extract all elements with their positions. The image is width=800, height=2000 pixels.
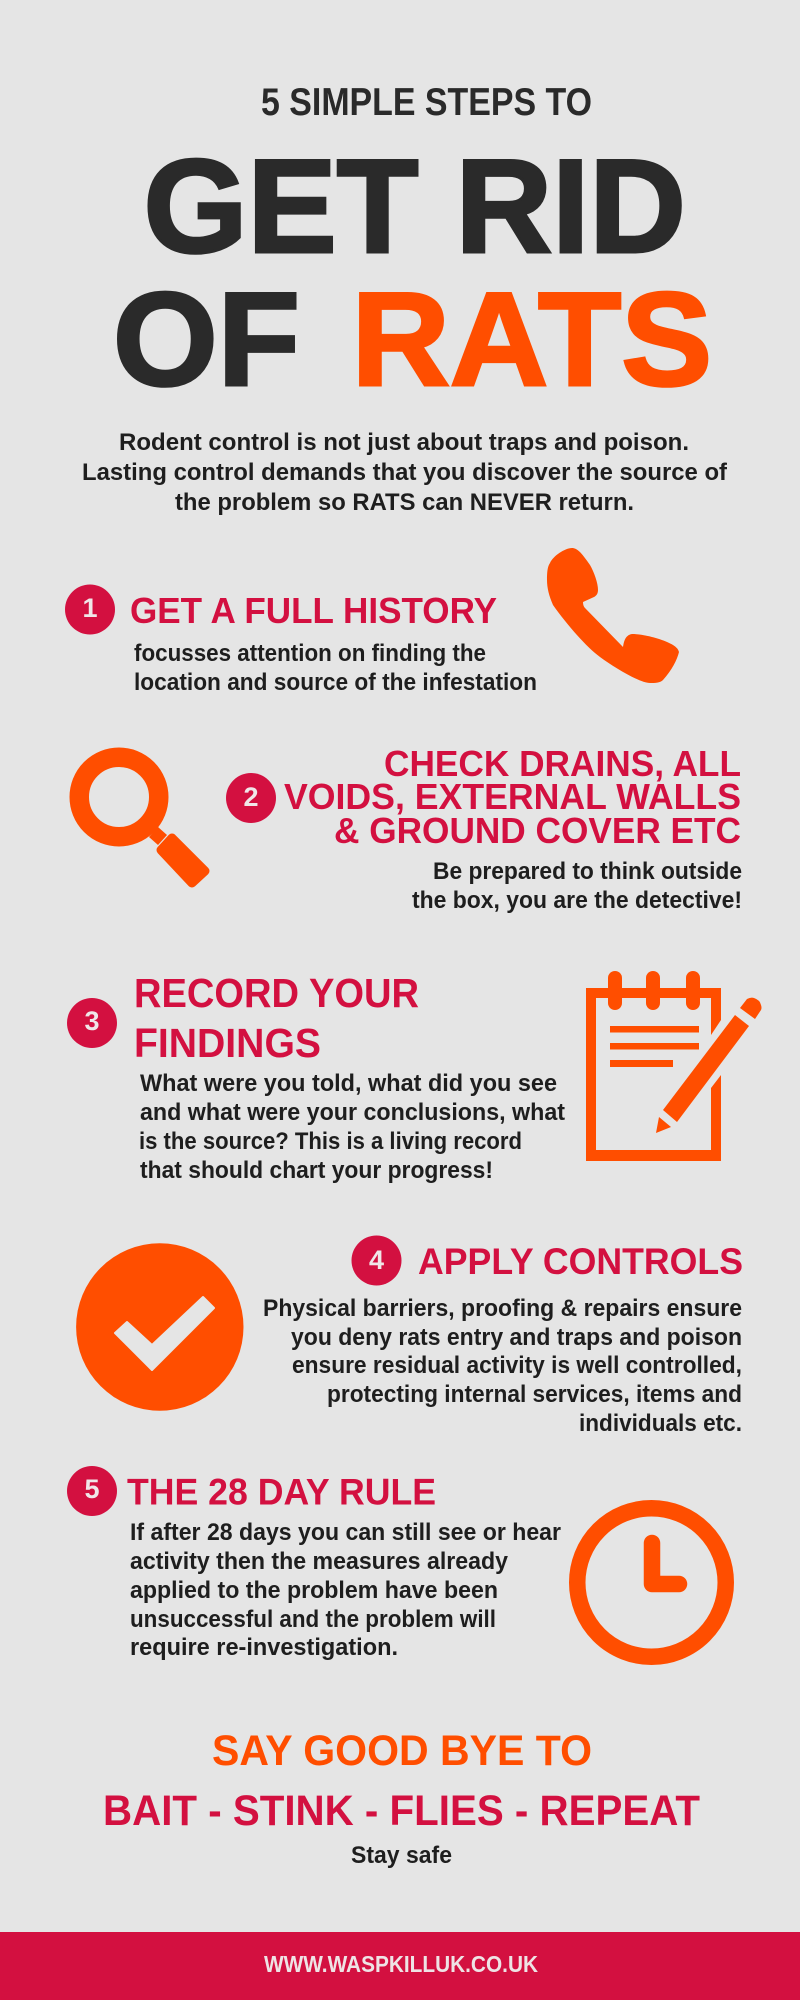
icon: notepad and pencil — [586, 971, 762, 1161]
step 3 text: What were you told, what did you see — [140, 1070, 557, 1097]
step 5 text: applied to the problem have been — [130, 1577, 498, 1604]
step 4 text: Physical barriers, proofing & repairs ensure — [263, 1295, 742, 1322]
step 2 text: the box, you are the detective! — [412, 887, 742, 914]
step 5 panel — [67, 1466, 726, 1661]
number badge 1 — [65, 584, 115, 634]
number badge 3 — [67, 998, 117, 1048]
step 3 text: is the source? This is a living record — [139, 1128, 522, 1155]
step 3 panel — [67, 970, 762, 1184]
number badge 5: 5 — [84, 1474, 100, 1504]
step 4 heading: APPLY CONTROLS — [418, 1241, 743, 1282]
bait stink flies repeat heading: BAIT - STINK - FLIES - REPEAT — [103, 1787, 700, 1835]
step 5 heading: THE 28 DAY RULE — [127, 1472, 436, 1512]
step 3 text: that should chart your progress! — [140, 1157, 493, 1184]
icon: magnifying glass — [79, 757, 205, 883]
step 4 text: ensure residual activity is well controlled, — [292, 1352, 742, 1379]
stay safe text: Stay safe — [351, 1842, 452, 1869]
intro text — [82, 429, 728, 516]
number badge 3: 3 — [84, 1006, 100, 1036]
website address: WWW.WASPKILLUK.CO.UK — [264, 1951, 538, 1977]
step 4 text: protecting internal services, items and — [327, 1381, 742, 1408]
intro text: the problem so RATS can NEVER return. — [175, 489, 634, 516]
number badge 5 — [67, 1466, 117, 1516]
step 3 text — [139, 1070, 565, 1184]
title line: get rid: GET RID — [144, 132, 686, 281]
step 5 text: require re-investigation. — [130, 1634, 398, 1661]
step 2 heading — [284, 743, 741, 851]
step 1 text: focusses attention on finding the — [134, 640, 486, 667]
footer bar — [0, 1932, 800, 2000]
say good bye heading: SAY GOOD BYE TO — [212, 1727, 592, 1775]
step 5 text: If after 28 days you can still see or hear — [130, 1519, 561, 1546]
subtitle: 5 SIMPLE STEPS TO — [261, 81, 592, 124]
icon: phone — [547, 548, 679, 683]
number badge 4: 4 — [369, 1245, 384, 1275]
step 4 text: individuals etc. — [579, 1410, 742, 1437]
title line: of: OF — [113, 266, 300, 414]
step 2 panel — [79, 743, 742, 914]
step 2 text — [412, 858, 742, 914]
step 1 heading: GET A FULL HISTORY — [130, 590, 497, 631]
number badge 2 — [226, 773, 276, 823]
step 5 text — [130, 1519, 561, 1661]
number badge 1: 1 — [82, 593, 98, 623]
number badge 4 — [352, 1236, 402, 1286]
step 2 heading: CHECK DRAINS, ALL — [384, 743, 741, 784]
intro text: Rodent control is not just about traps and poison. — [119, 429, 689, 456]
step 4 panel — [76, 1236, 743, 1437]
number badge 2: 2 — [243, 782, 259, 812]
intro text: Lasting control demands that you discover the source of — [82, 459, 728, 486]
step 4 text — [263, 1295, 742, 1437]
closing message — [103, 1727, 700, 1869]
header panel — [82, 81, 728, 516]
icon: check mark circle — [76, 1243, 244, 1411]
step 2 heading: VOIDS, EXTERNAL WALLS — [284, 776, 741, 817]
step 1 text: location and source of the infestation — [134, 669, 537, 696]
step 3 heading: RECORD YOUR — [134, 970, 419, 1016]
step 3 heading — [134, 970, 419, 1066]
step 5 text: activity then the measures already — [130, 1548, 509, 1575]
title line: rats: RATS — [352, 264, 712, 414]
step 3 heading: FINDINGS — [134, 1020, 321, 1066]
step 3 text: and what were your conclusions, what — [140, 1099, 565, 1126]
step 4 text: you deny rats entry and traps and poison — [291, 1324, 742, 1351]
step 1 text — [134, 640, 537, 696]
step 2 text: Be prepared to think outside — [433, 858, 742, 885]
icon: clock — [577, 1508, 726, 1657]
step 2 heading: & GROUND COVER ETC — [334, 810, 741, 851]
step 5 text: unsuccessful and the problem will — [130, 1606, 496, 1633]
step 1 panel — [65, 548, 679, 696]
